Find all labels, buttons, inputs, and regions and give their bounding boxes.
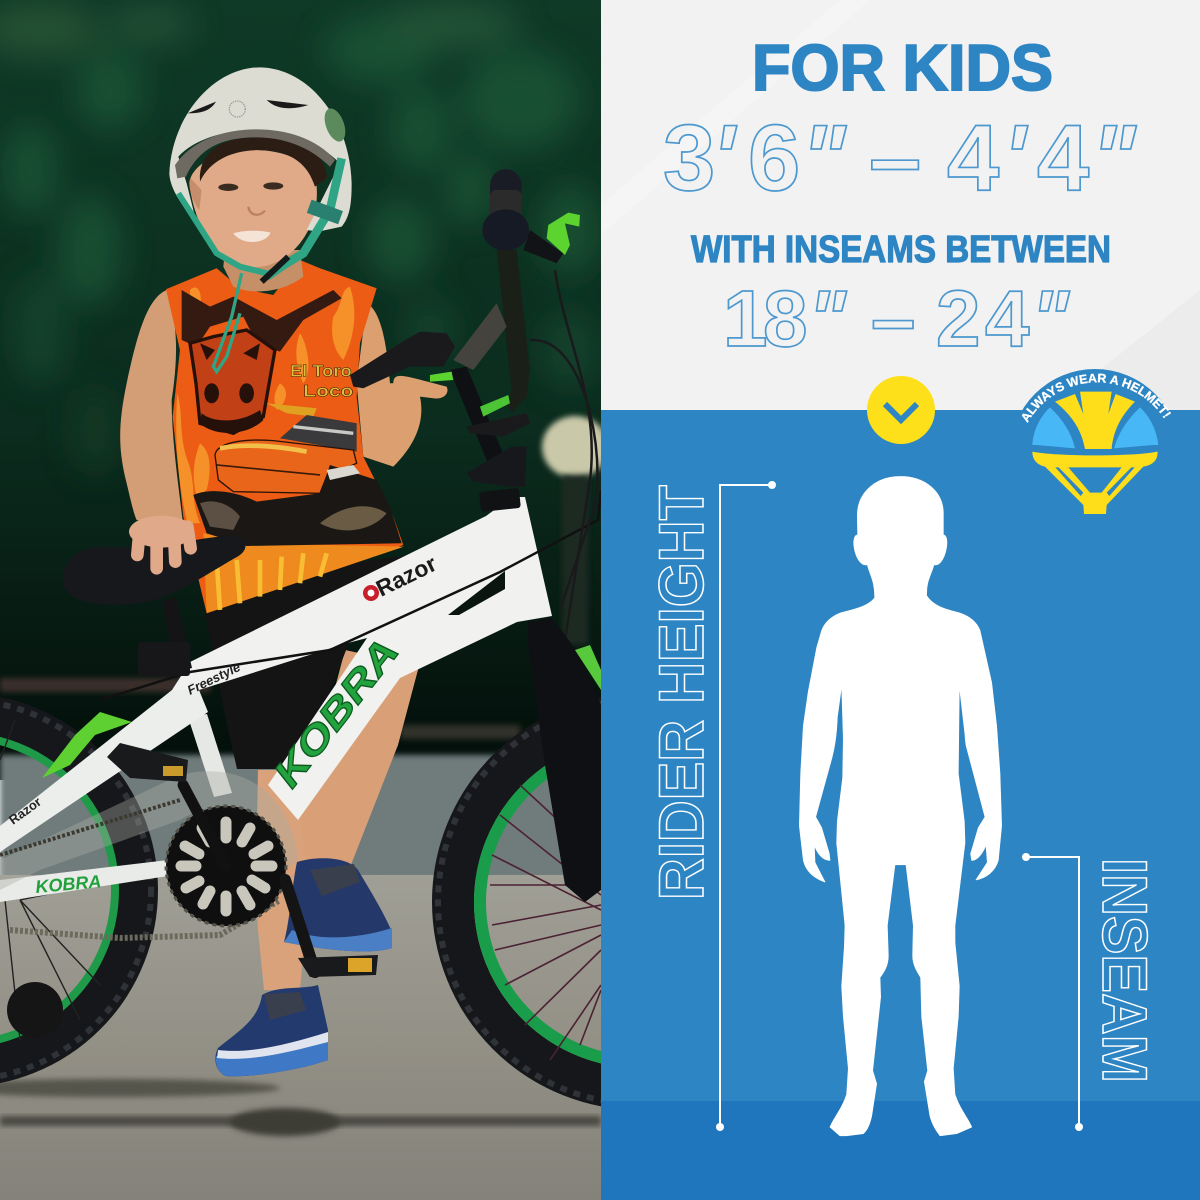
t-shirt with flame print: Loco: [303, 382, 353, 401]
rider hand on saddle: [129, 516, 194, 568]
text: rider height range: ': [712, 105, 737, 210]
helmet and green straps: [169, 67, 352, 372]
rider legs and shoes: [205, 555, 419, 1076]
text: inseam range: –: [871, 274, 916, 363]
neck and head: [189, 137, 327, 291]
t-shirt with flame print: [166, 260, 404, 613]
text: inseam range: ": [808, 274, 847, 363]
fork and front wheel clip: [528, 618, 601, 902]
helmet illustration: [1032, 392, 1158, 514]
saddle and seat post: [63, 536, 246, 676]
text: inseam range: 2: [936, 274, 980, 363]
flame streaks: [176, 287, 354, 523]
bike logo: KOBRA on chain stay: KOBRA: [35, 871, 102, 897]
badge: always wear a helmet: [1022, 369, 1172, 514]
left arm: [120, 290, 183, 527]
text: rider height range: 3: [663, 105, 715, 210]
text: rider height range: ': [1003, 105, 1028, 210]
text: inseam range: 8: [763, 274, 808, 363]
label: INSEAM: INSEAM: [1089, 858, 1159, 1083]
text: rider height range: 4: [1037, 105, 1089, 210]
bike logo: KOBRA on down tube: KOBRA: [266, 631, 407, 796]
icon: yellow chevron button: [867, 376, 935, 444]
bike logo: Razor on rear stay: Razor: [6, 794, 44, 827]
bicycle frame: [0, 270, 601, 902]
panel: blue sizing panel: [601, 410, 1200, 1200]
lower shirt yellow flames: [203, 533, 404, 613]
bike logo: Razor: Razor: [372, 550, 441, 601]
subheading: WITH INSEAMS BETWEEN: WITH INSEAMS BETWEEN: [691, 229, 1111, 271]
front wheel: [438, 700, 842, 1104]
badge curved text: ALWAYS WEAR A HELMET!: [1022, 374, 1172, 423]
handlebars, grips and brake lever: [350, 169, 580, 512]
text: rider height range: ": [1091, 105, 1137, 210]
right arm and hand: [357, 303, 447, 467]
shirt print: car: [193, 403, 402, 546]
heading: FOR KIDS: FOR KIDS: [752, 31, 1053, 104]
rider upper body: [120, 67, 580, 613]
photo background: trees and pavement: [0, 0, 608, 1200]
measure line: rider height: [716, 481, 776, 1131]
panel: top right header background: [601, 0, 1200, 410]
text: inseam range: 4: [985, 274, 1030, 363]
text: rider height range: 4: [947, 105, 999, 210]
text: rider height range: 6: [748, 105, 800, 210]
bike logo: Freestyle: Freestyle: [185, 659, 243, 698]
rear wheel: [0, 700, 151, 1080]
label: RIDER HEIGHT: RIDER HEIGHT: [647, 485, 717, 900]
photo: boy on a BMX bike: [0, 0, 842, 1200]
text: inseam range: ": [1031, 274, 1070, 363]
shirt text: El Toro Loco: El Toro: [290, 362, 352, 381]
drivetrain: chain guard, chainring and pedals: [0, 743, 378, 977]
text: inseam range: 1: [723, 274, 768, 363]
text: rider height range: ": [801, 105, 847, 210]
text: rider height range: –: [869, 105, 921, 210]
icon: child body silhouette: [799, 477, 1002, 1136]
shirt print: bull head: [182, 290, 342, 433]
measure line: inseam: [1022, 853, 1083, 1131]
